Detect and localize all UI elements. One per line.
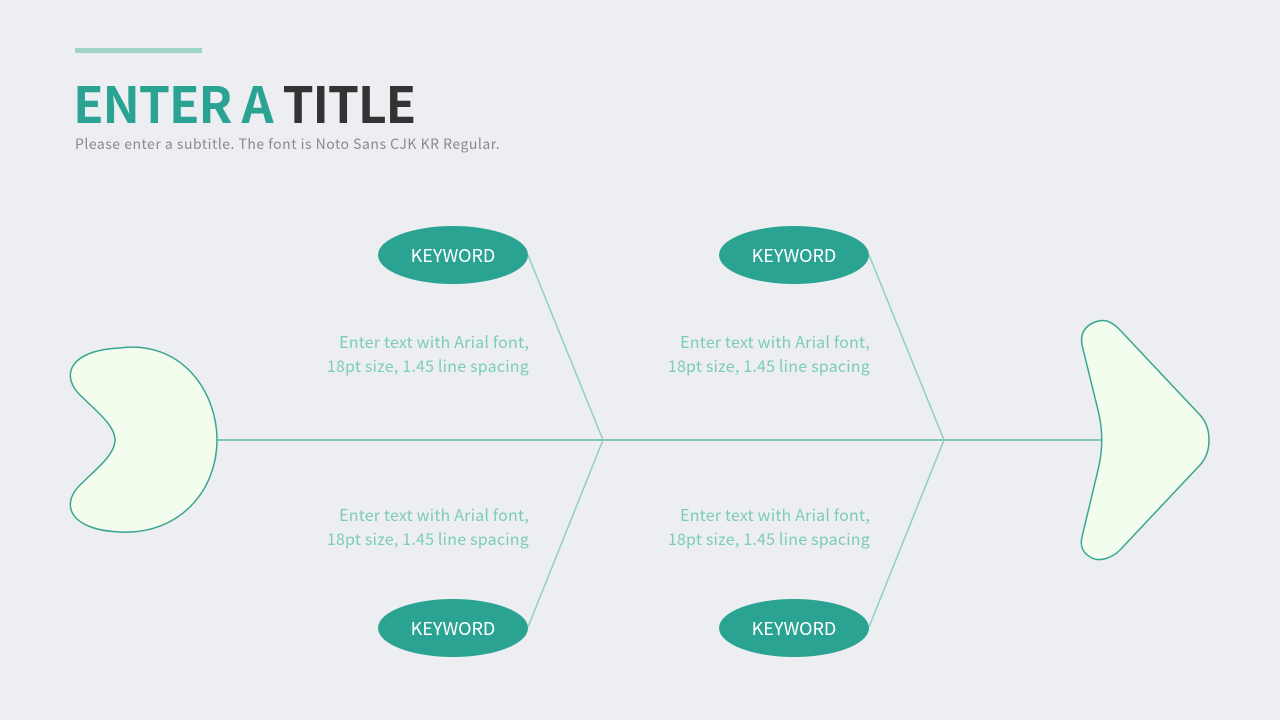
subtitle: Please enter a subtitle. The font is Noto Sans CJK KR Regular. (75, 134, 500, 154)
accent bar (75, 48, 202, 53)
text block 1: 18pt size, 1.45 line spacing (327, 353, 529, 377)
text block 3: Enter text with Arial font, (339, 502, 529, 526)
text block 3: 18pt size, 1.45 line spacing (327, 526, 529, 550)
keyword ellipse 1: KEYWORD (411, 242, 495, 268)
keyword ellipse 2: KEYWORD (752, 242, 836, 268)
fish tail (70, 347, 217, 532)
text block 2: Enter text with Arial font, (680, 329, 870, 353)
bones (528, 255, 944, 627)
keyword ellipse 3 (378, 599, 528, 657)
keyword ellipse 2 (719, 226, 869, 284)
text block 4: Enter text with Arial font, (680, 502, 870, 526)
keyword ellipse 1 (378, 226, 528, 284)
keyword ellipse 4: KEYWORD (752, 615, 836, 641)
keyword ellipse 4 (719, 599, 869, 657)
text block 1 (327, 329, 529, 377)
text block 2 (668, 329, 870, 377)
text block 4: 18pt size, 1.45 line spacing (668, 526, 870, 550)
keyword ellipse 3: KEYWORD (411, 615, 495, 641)
text block 2: 18pt size, 1.45 line spacing (668, 353, 870, 377)
spine (217, 439, 1103, 441)
text block 1: Enter text with Arial font, (339, 329, 529, 353)
title: ENTER A TITLE (73, 66, 415, 138)
fish head (1081, 320, 1209, 560)
text block 4 (668, 502, 870, 550)
text block 3 (327, 502, 529, 550)
